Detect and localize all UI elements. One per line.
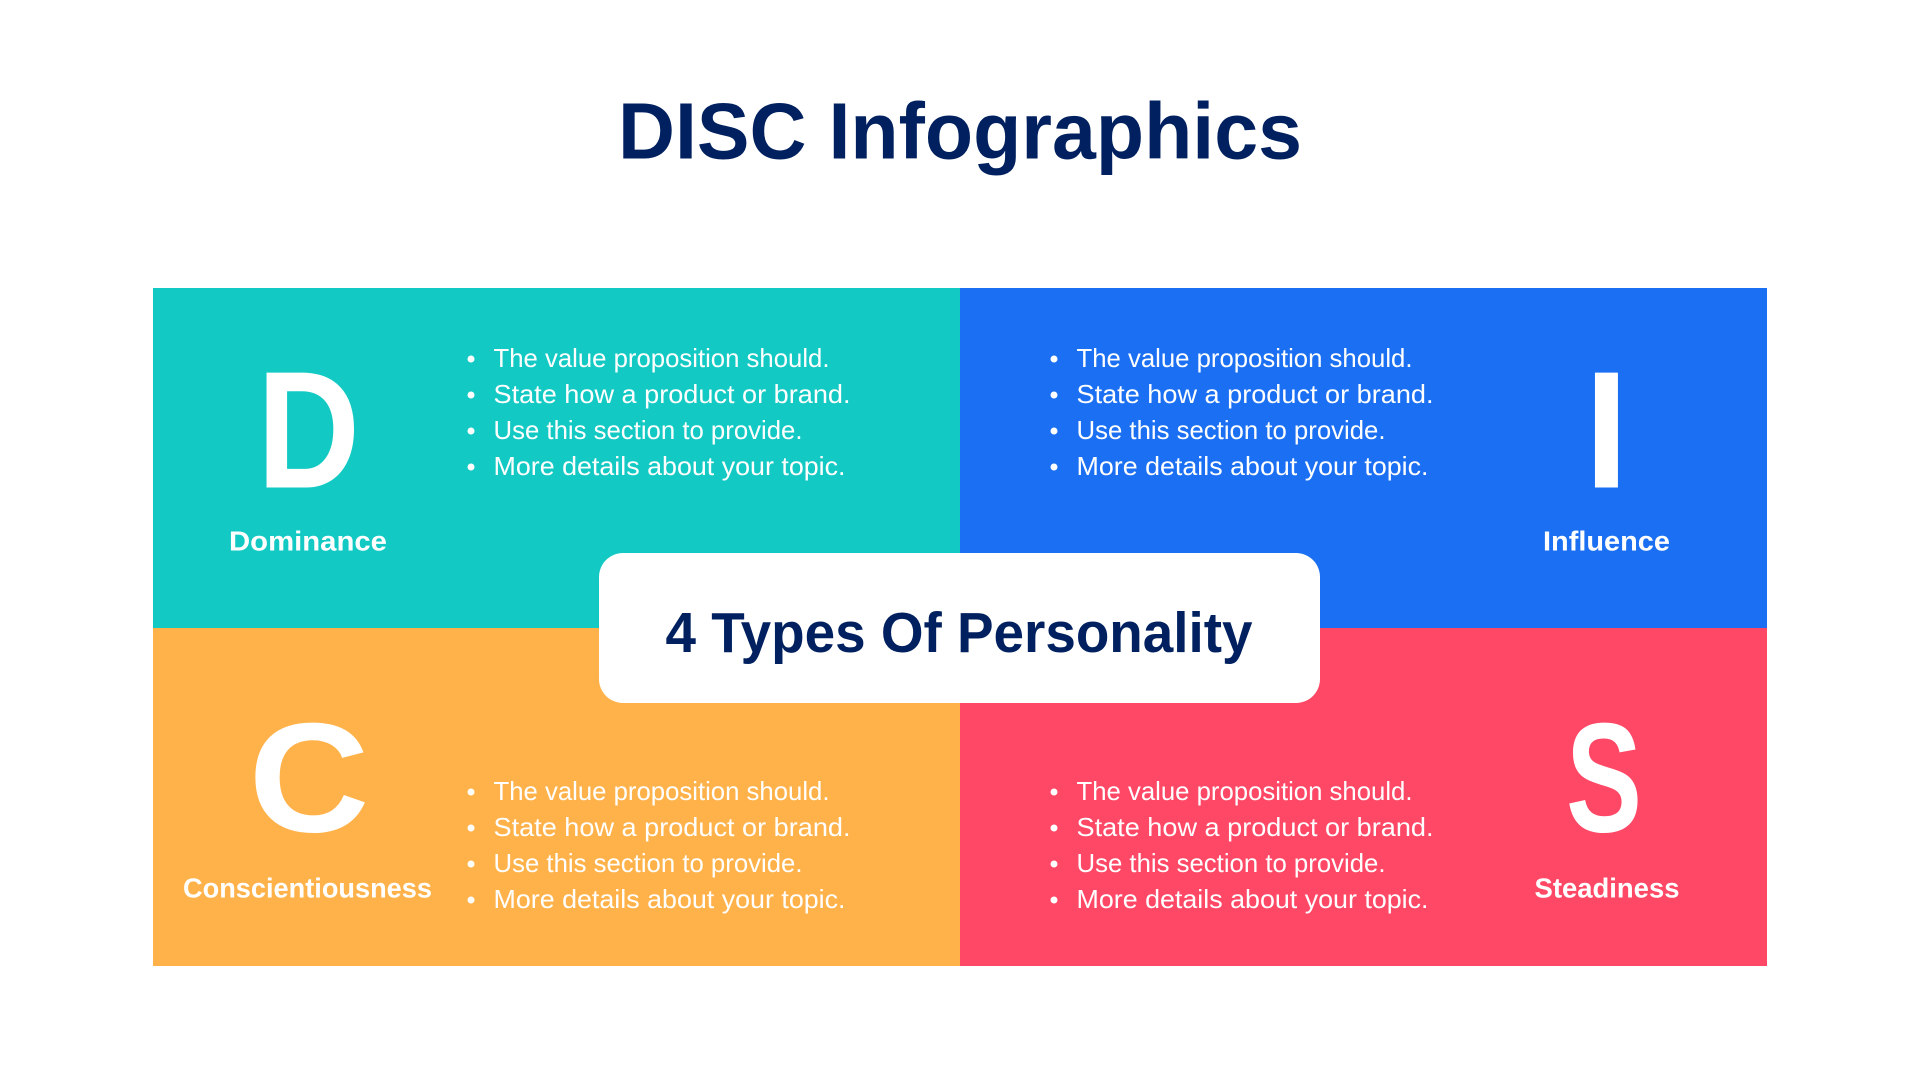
letter C: C bbox=[248, 692, 370, 866]
bullet list: steadiness bbox=[1050, 776, 1434, 914]
bullet list: influence: State how a product or brand. bbox=[1076, 379, 1434, 409]
bullet list: dominance: State how a product or brand. bbox=[494, 379, 850, 409]
bullet list: dominance: The value proposition should. bbox=[494, 343, 830, 373]
card heading: 4 Types Of Personality bbox=[666, 601, 1253, 665]
label: Steadiness: Steadiness bbox=[1534, 872, 1680, 904]
title: DISC Infographics bbox=[618, 86, 1302, 176]
panel: steadiness bbox=[960, 628, 1767, 966]
bullet list: conscientiousness bbox=[468, 776, 850, 914]
bullet list: conscientiousness: State how a product or brand. bbox=[494, 812, 850, 842]
bullet list: influence: The value proposition should. bbox=[1076, 343, 1412, 373]
bullet list: influence: Use this section to provide. bbox=[1076, 415, 1386, 445]
bullet list: conscientiousness: More details about your topic. bbox=[494, 884, 846, 914]
bullet list: conscientiousness: Use this section to provide. bbox=[494, 848, 802, 878]
panel: conscientiousness bbox=[153, 628, 960, 966]
bullet list: influence bbox=[1050, 343, 1434, 481]
bullet list: steadiness: Use this section to provide. bbox=[1076, 848, 1386, 878]
bullet list: steadiness: State how a product or brand. bbox=[1076, 812, 1434, 842]
label: Dominance: Dominance bbox=[229, 526, 387, 556]
center card bbox=[599, 553, 1320, 703]
bullet list: dominance: Use this section to provide. bbox=[494, 415, 802, 445]
letter I: I bbox=[1584, 338, 1629, 524]
bullet list: steadiness: The value proposition should. bbox=[1076, 776, 1412, 806]
panel: influence bbox=[960, 288, 1767, 628]
panel: dominance bbox=[153, 288, 960, 628]
bullet list: influence: More details about your topic. bbox=[1076, 451, 1428, 481]
bullet list: dominance bbox=[468, 343, 850, 481]
label: Conscientiousness: Conscientiousness bbox=[183, 872, 432, 904]
label: Influence: Influence bbox=[1543, 526, 1670, 556]
bullet list: dominance: More details about your topic. bbox=[494, 451, 846, 481]
letter D: D bbox=[257, 338, 360, 524]
letter S: S bbox=[1566, 692, 1642, 866]
bullet list: steadiness: More details about your topic. bbox=[1076, 884, 1428, 914]
bullet list: conscientiousness: The value proposition should. bbox=[494, 776, 830, 806]
